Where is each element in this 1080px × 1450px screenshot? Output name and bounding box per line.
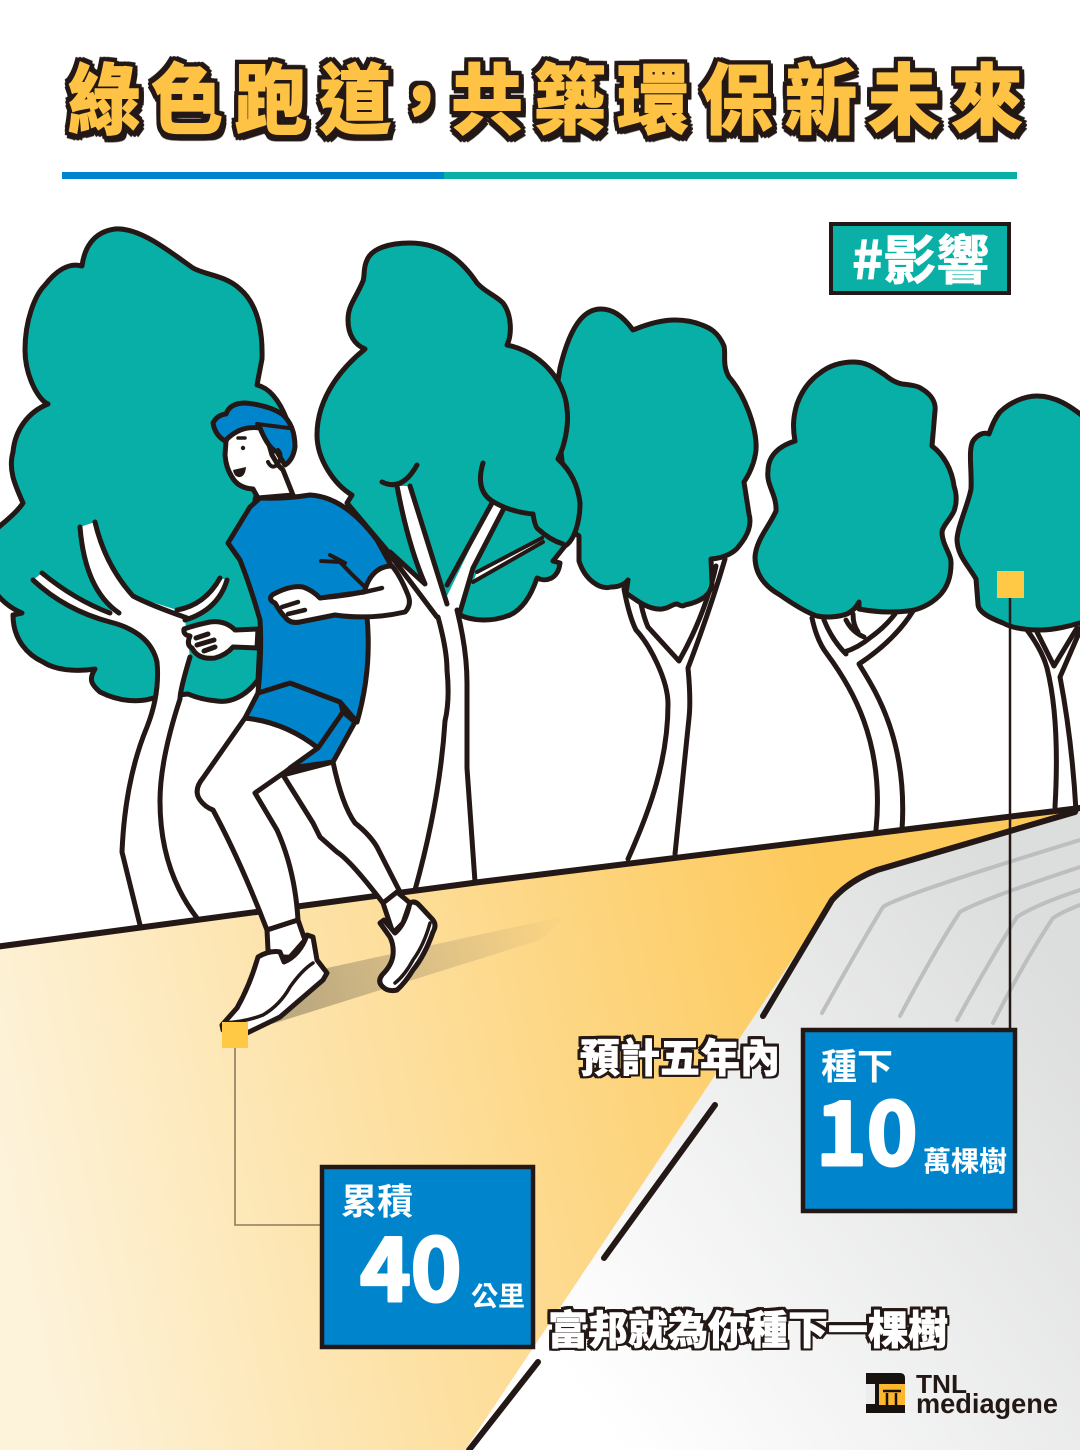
canopy <box>317 243 580 620</box>
trunk and branches <box>33 522 227 925</box>
tree 1 <box>0 229 287 925</box>
front sock <box>267 920 305 957</box>
tree 3 <box>555 309 756 859</box>
shorts <box>245 683 355 768</box>
front leg <box>197 718 318 930</box>
neck and head <box>225 424 293 498</box>
road surface <box>0 808 1078 1450</box>
road lane lines <box>822 840 1080 1023</box>
title underline <box>62 172 1017 179</box>
back sock <box>383 892 410 933</box>
callout marker: tree <box>997 571 1024 1030</box>
tree 5 <box>957 396 1080 812</box>
stat box: 10 萬棵樹: 10 <box>816 1065 917 1190</box>
shirt <box>228 495 392 722</box>
hair <box>213 403 295 465</box>
stat box: 10 萬棵樹: 萬棵樹 <box>923 1140 1007 1180</box>
logo: TNL mediagene <box>866 1369 1058 1419</box>
logo: TNL mediagene: mediagene <box>916 1388 1058 1419</box>
background: gray road surface <box>465 808 1080 1450</box>
runner shadow <box>272 915 570 1024</box>
canopy <box>0 229 287 701</box>
stat box: 10 萬棵樹 <box>803 1030 1015 1211</box>
tree 4 <box>755 362 956 830</box>
stat box: 40 公里: 40 <box>360 1201 461 1326</box>
tag: #影響: #影響 <box>852 219 989 295</box>
stat box: 40 公里 <box>322 1167 533 1347</box>
front arm <box>271 566 409 622</box>
back arm <box>184 622 258 658</box>
ground line <box>0 808 1080 947</box>
road edge dashes <box>469 812 1075 1450</box>
face <box>233 424 289 477</box>
tree 2 <box>317 243 580 892</box>
stat box: 40 公里: 公里 <box>471 1275 525 1314</box>
back shoe <box>380 902 435 991</box>
front shoe <box>222 935 327 1033</box>
stat box: 10 萬棵樹: 種下 <box>821 1038 893 1090</box>
trunk and branches <box>385 486 503 892</box>
logo: TNL mediagene: TNL <box>916 1369 967 1399</box>
back leg <box>283 762 400 903</box>
runner <box>184 403 435 1033</box>
stat box: 40 公里: 累積 <box>341 1173 413 1225</box>
caption: 預計五年內: 預計五年內 <box>580 1026 780 1084</box>
callout marker: shoe <box>222 1022 328 1225</box>
sleeve fold <box>321 555 365 587</box>
caption: 富邦就為你種下一棵樹: 富邦就為你種下一棵樹 <box>548 1298 948 1356</box>
title: 綠色跑道，共築環保新未來 <box>68 40 1023 151</box>
